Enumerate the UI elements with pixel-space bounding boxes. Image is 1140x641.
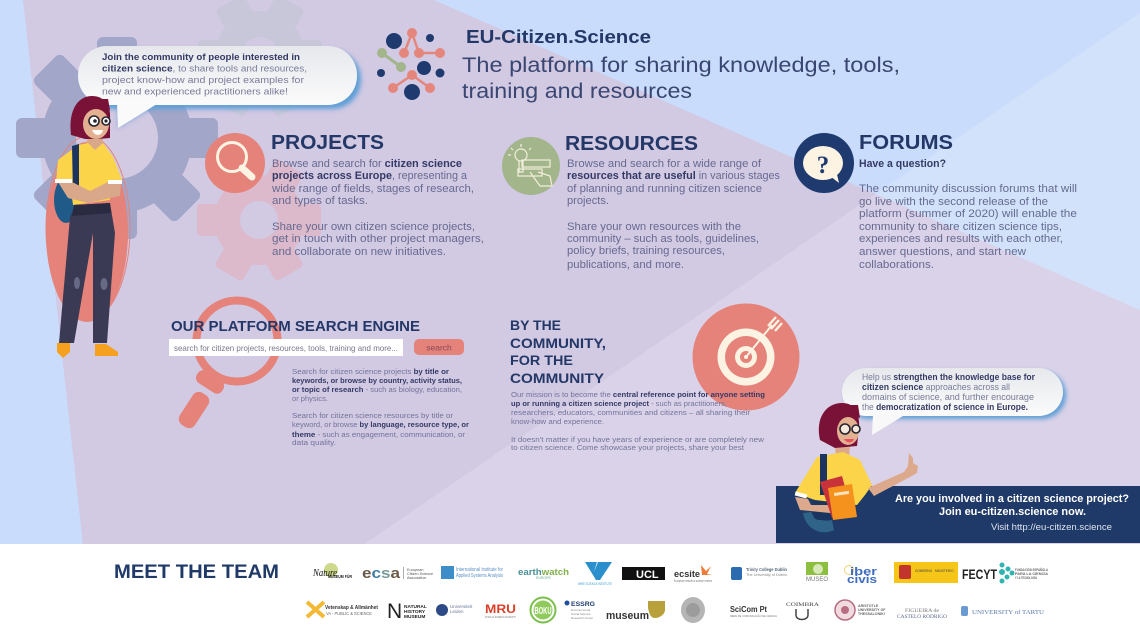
mission text: know-how and experience. xyxy=(511,417,604,426)
section: resources: resources that are useful in various stages xyxy=(567,170,780,182)
logo: Trinity College Dublin: Trinity College Dublin xyxy=(746,567,787,572)
call-to-action banner: Are you involved in a citizen science project? xyxy=(895,493,1129,505)
by the community heading: COMMUNITY, xyxy=(510,336,606,351)
logo: Museo xyxy=(806,562,828,583)
section: projects: Share your own citizen science projects, xyxy=(272,221,475,233)
speech bubble: join the community: citizen science , to share tools and resources, xyxy=(102,64,307,74)
section: forums: community to share citizen science tips, xyxy=(859,221,1062,233)
title xyxy=(462,26,900,103)
gear: dark xyxy=(16,37,218,239)
logo: Vetenskap och Allmanhet: Vetenskap & Allmänhet xyxy=(325,605,378,611)
logo: Natural History Museum: MUSEUM xyxy=(404,614,425,620)
section: resources: projects. xyxy=(567,195,609,207)
section: resources: community – such as tools, guidelines, xyxy=(567,233,759,245)
gear: grey top xyxy=(198,0,322,118)
logo: Natural History Museum xyxy=(387,600,427,623)
search engine heading: OUR PLATFORM SEARCH ENGINE xyxy=(171,318,420,335)
logo: FECYT: FUNDACIÓN ESPAÑOLA xyxy=(1015,567,1048,572)
search description: data quality. xyxy=(292,438,336,447)
icon: resources xyxy=(502,137,560,195)
logo: MRU: MYKOLAS ROMERIS UNIVERSITY xyxy=(485,615,516,619)
logo: circular seal xyxy=(681,597,705,623)
logo: EU-Citizen.Science network xyxy=(377,28,445,100)
logo: ecsa xyxy=(362,565,433,582)
section: resources: RESOURCES xyxy=(565,132,698,155)
section: projects: and collaborate on new initiatives. xyxy=(272,246,446,258)
logo: Figueira de Castelo Rodrigo: CASTELO RODRIGO xyxy=(897,614,947,620)
logo: Universiteit Leiden: Universiteit xyxy=(450,604,473,609)
section: resources: Browse and search for a wide range of xyxy=(567,158,761,170)
speech bubble: join the community: project know-how and project examples for xyxy=(102,75,305,86)
logo: ESSRG xyxy=(564,600,595,620)
logo: museum xyxy=(606,601,665,622)
logo: ibercivis: iber xyxy=(850,566,878,578)
logo: Museo: MUSEO xyxy=(806,576,828,583)
logo: ecsite: ecsite xyxy=(674,569,700,579)
search description: Search for citizen science projects by title or xyxy=(292,367,449,376)
section: forums: FORUMS xyxy=(859,131,953,154)
logo: earthwatch: earthwatch xyxy=(518,567,569,578)
search description: or topic of research - such as biology, education, xyxy=(292,385,462,394)
logo: University of Tartu: UNIVERSITY of TARTU xyxy=(972,609,1045,616)
section: projects: PROJECTS xyxy=(271,131,384,154)
logo: IIASA: Applied Systems Analysis xyxy=(456,573,503,579)
logo: ecsa: Association xyxy=(407,576,426,580)
mission text xyxy=(511,390,765,452)
mission text: to citizen science. Come showcase your projects, share your best xyxy=(511,443,745,452)
logo: UCL xyxy=(622,567,665,581)
mission text: up or running a citizen science project - such as practitioners, xyxy=(511,399,727,408)
logo: ESSRG: ESSRG xyxy=(571,601,595,608)
logo: Spanish government: GOBIERNO xyxy=(915,569,933,573)
search description: keyword, or browse by language, resource type, or xyxy=(292,420,469,429)
search button xyxy=(414,339,464,355)
gear: pink xyxy=(197,158,321,282)
icon: projects magnifier xyxy=(205,133,265,193)
section: forums: platform (summer of 2020) will enable the xyxy=(859,208,1077,220)
search description xyxy=(292,367,469,447)
section: forums: collaborations. xyxy=(859,259,934,271)
section: projects: get in touch with other project managers, xyxy=(272,233,484,245)
logo: SciCom Pt: REDE DE COMUNICAÇÃO DE CIÊNCIA xyxy=(730,613,777,618)
call-to-action banner: Visit http://eu-citizen.science xyxy=(991,522,1112,533)
logo: FECYT: FECYT xyxy=(962,566,997,582)
logo: ecsa: European xyxy=(407,568,423,572)
mission text: researchers, educators, communities and citizens – all sharing their xyxy=(511,408,750,417)
logo: ecsa: ecsa xyxy=(362,565,401,582)
logo: museum fur naturkunde xyxy=(312,563,353,579)
title: EU-Citizen.Science xyxy=(466,26,651,47)
search button: search xyxy=(426,342,452,352)
section: forums: Have a question? xyxy=(859,158,946,170)
speech bubble: join the community xyxy=(78,46,361,128)
logo: Universiteit Leiden xyxy=(436,604,473,616)
logo: Natural History Museum: HISTORY xyxy=(404,609,426,615)
icon: target xyxy=(692,304,800,410)
search input xyxy=(169,339,403,356)
logo: BOKU: BOKU xyxy=(534,606,552,617)
logo: SciCom Pt: SciCom Pt xyxy=(730,605,767,614)
logo: SciCom Pt xyxy=(730,605,777,618)
speech bubble: join the community: Join the community of people interested in xyxy=(102,52,300,63)
logo: ibercivis xyxy=(844,566,878,586)
section: projects: Browse and search for citizen science xyxy=(272,158,462,170)
logo: museum fur naturkunde: Nature xyxy=(312,568,337,579)
speech bubble: help us: the democratization of science in Europe. xyxy=(862,402,1028,413)
logo: FECYT: PARA LA CIENCIA xyxy=(1015,572,1049,576)
team band xyxy=(0,544,1140,641)
logo: Vetenskap och Allmanhet xyxy=(307,602,378,617)
section: projects: projects across Europe, representing a xyxy=(272,170,467,182)
section: resources xyxy=(565,132,780,271)
logo: ibercivis: civis xyxy=(847,574,877,586)
search description: theme - such as engagement, communication, or xyxy=(292,430,465,439)
logo: Aristotle University: ARISTOTLE xyxy=(858,604,879,608)
title: The platform for sharing knowledge, tools, xyxy=(462,54,900,77)
speech bubble: help us: citizen science approaches across all xyxy=(862,382,1010,393)
section: resources: Share your own resources with the xyxy=(567,221,741,233)
logo: UCL: UCL xyxy=(636,569,659,581)
logo: Coimbra: COIMBRA xyxy=(786,602,819,608)
section: forums: answer questions, and start new xyxy=(859,246,1026,258)
speech bubble: help us: Help us strengthen the knowledge base for xyxy=(862,372,1035,383)
character: woman with crossed arms xyxy=(46,96,130,358)
section: resources: policy briefs, training resources, xyxy=(567,245,725,257)
team band: MEET THE TEAM xyxy=(114,561,279,583)
logo: museum: museum xyxy=(606,610,649,622)
logo: ESSRG: Research Group xyxy=(571,616,593,620)
logo: ESI blue V: WIRE SCIENCE INSTITUTE xyxy=(578,582,612,586)
by the community heading xyxy=(510,318,606,386)
speech bubble: help us xyxy=(842,368,1066,435)
title: training and resources xyxy=(462,80,692,103)
by the community heading: FOR THE xyxy=(510,353,573,368)
logo: Figueira de Castelo Rodrigo xyxy=(897,609,947,620)
icon: large magnifier xyxy=(176,300,278,431)
logo: Vetenskap och Allmanhet: VA - PUBLIC & SCIENCE xyxy=(326,611,372,616)
logo: Aristotle University: THESSALONIKI xyxy=(858,612,885,616)
logo: FECYT xyxy=(962,562,1049,584)
logo: ecsite xyxy=(674,565,712,583)
speech bubble: help us: domains of science, and further encourage xyxy=(862,392,1034,403)
icon: forums question bubble xyxy=(794,133,854,193)
logo: Aristotle University xyxy=(835,600,886,620)
logo: museum fur naturkunde: MUSEUM FÜR xyxy=(328,573,353,579)
by the community heading: BY THE xyxy=(510,318,561,333)
search description: keywords, or browse by country, activity status, xyxy=(292,376,462,385)
mission text: Our mission is to become the central reference point for anyone setting xyxy=(511,390,765,399)
logo: ESSRG: Social Science xyxy=(571,612,591,616)
logo: ESSRG: Environmental xyxy=(571,608,591,612)
logo: ecsite: European network of science centres xyxy=(674,579,712,583)
call-to-action banner: Join eu-citizen.science now. xyxy=(939,506,1086,518)
section: resources: of planning and running citizen science xyxy=(567,183,762,195)
mission text: It doesn't matter if you have years of experience or are completely new xyxy=(511,435,765,444)
search description: or physics. xyxy=(292,394,328,403)
logo: Trinity College Dublin: The University of Dublin xyxy=(746,573,787,577)
logo: Figueira de Castelo Rodrigo: FIGUEIRA de xyxy=(905,609,939,614)
search input: search for citizen projects, resources, tools, training and more... xyxy=(174,343,398,353)
logo: Natural History Museum: N xyxy=(387,600,402,623)
by the community heading: COMMUNITY xyxy=(510,371,604,386)
logo: BOKU xyxy=(530,598,556,622)
logo: Trinity College Dublin xyxy=(731,567,787,580)
logo: Universiteit Leiden: Leiden xyxy=(450,609,464,614)
call-to-action banner xyxy=(776,486,1140,543)
section: resources: publications, and more. xyxy=(567,259,684,271)
speech bubble: join the community: new and experienced practitioners alike! xyxy=(102,86,288,98)
logo: University of Tartu xyxy=(961,606,1045,616)
logo: IIASA xyxy=(441,566,503,579)
icon: forums question bubble: ? xyxy=(817,152,829,179)
section: projects: and types of tasks. xyxy=(272,195,368,207)
logo: Spanish government xyxy=(894,562,958,583)
logo: ecsa: Citizen Science xyxy=(407,572,433,576)
logo: MRU: MRU xyxy=(485,602,516,616)
section: projects: wide range of fields, stages of research, xyxy=(271,183,474,195)
logo: Coimbra xyxy=(786,602,819,620)
logo: ESI blue V xyxy=(578,562,612,586)
section: forums xyxy=(859,131,1077,271)
logo: Spanish government: MINISTERIO xyxy=(935,569,954,573)
search description: Search for citizen science resources by title or xyxy=(292,411,453,420)
logo: FECYT: Y LA TECNOLOGÍA xyxy=(1015,575,1037,580)
section: forums: go live with the second release of the xyxy=(859,196,1048,208)
section: projects xyxy=(271,131,484,258)
character: woman with books xyxy=(795,403,918,532)
logo: earthwatch: EUROPE xyxy=(536,576,551,580)
logo: Natural History Museum: NATURAL xyxy=(404,604,427,610)
logo: IIASA: International Institute for xyxy=(456,567,503,573)
section: forums: experiences and results with each other, xyxy=(859,233,1063,245)
logo: Aristotle University: UNIVERSITY OF xyxy=(858,608,886,612)
section: forums: The community discussion forums that will xyxy=(859,183,1077,195)
